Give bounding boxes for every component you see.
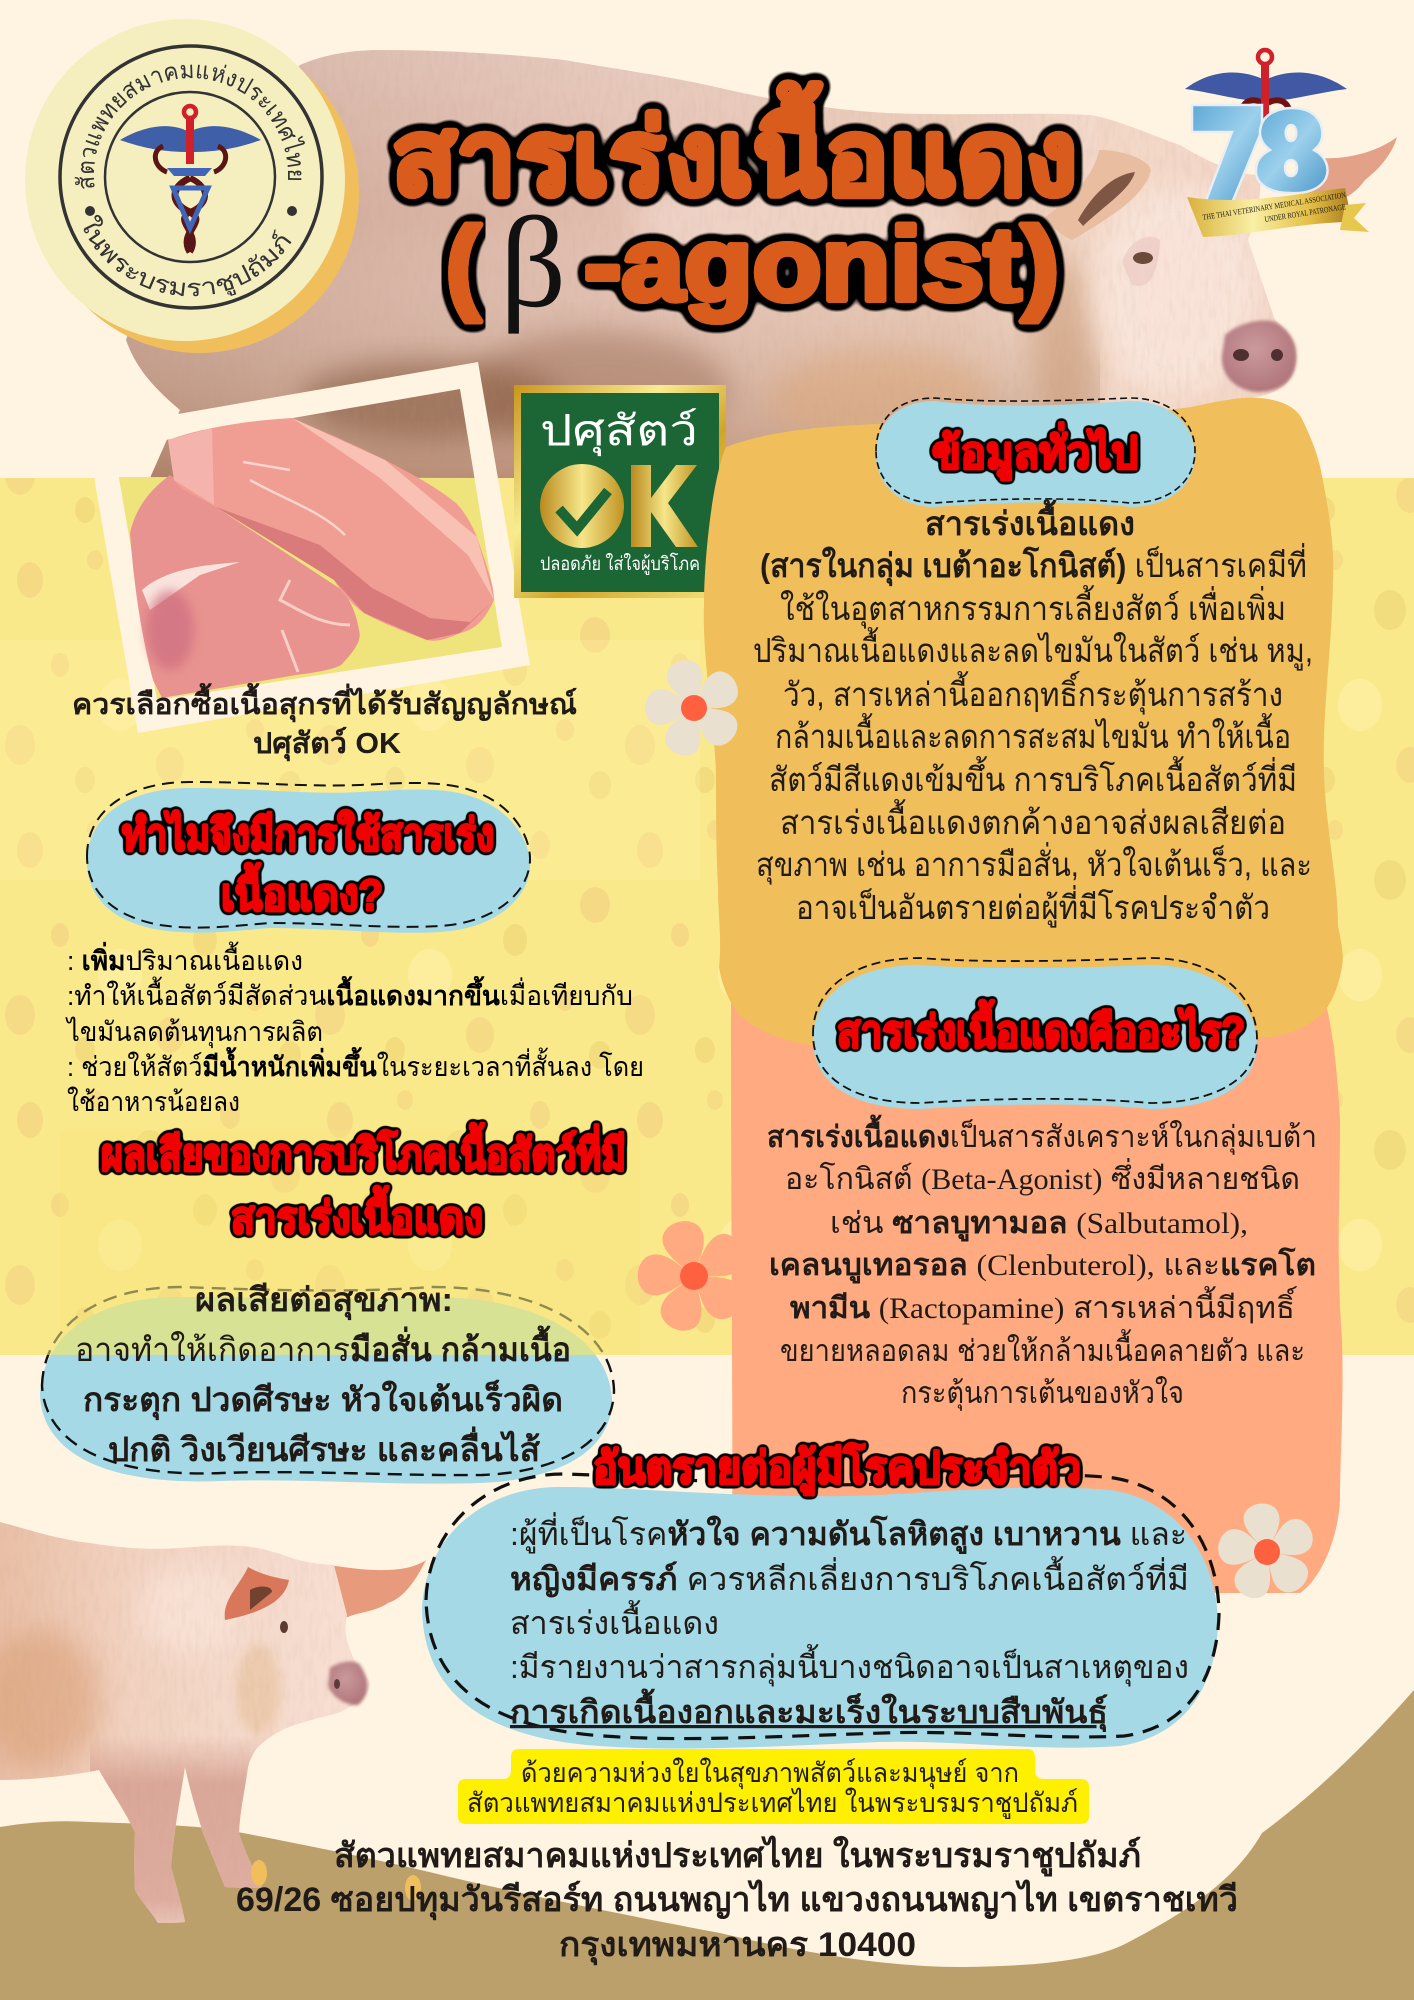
badge: ปศุสัตว์ OK (514, 385, 726, 598)
footer address: สัตวแพทยสมาคมแห่งประเทศไทย ในพระบรมราชูปถัมภ์ (334, 1835, 1141, 1877)
photo frame with pork (86, 362, 530, 733)
text block: reasons (65, 941, 644, 1117)
text block: general information: กล้ามเนื้อและลดการสะสมไขมัน ทำให้เนื้อ (775, 713, 1291, 755)
text block: what is it: กระตุ้นการเต้นของหัวใจ (901, 1376, 1184, 1412)
text block: general information: อาจเป็นอันตรายต่อผู้ที่มีโรคประจำตัว (796, 885, 1270, 928)
panel: risk groups: การเกิดเนื้องอกและมะเร็งในระบบสืบพันธุ์ (510, 1688, 1108, 1733)
text block: general information: สัตว์มีสีแดงเข้มขึ้น การบริโภคเนื้อสัตว์ที่มี (769, 756, 1297, 798)
heading bubble: what is it (813, 958, 1257, 1109)
text block: general information (753, 499, 1313, 928)
panel: what is it background (731, 1000, 1343, 1593)
panel: health effects: กระตุก ปวดศีรษะ หัวใจเต้นเร็วผิด (83, 1379, 563, 1421)
flower: left of general panel (644, 656, 744, 760)
callout: yellow message (458, 1749, 1089, 1824)
heading bubble: what is it: สารเร่งเนื้อแดงคืออะไร? (837, 999, 1245, 1057)
caption: choose pork with OK mark: ปศุสัตว์ OK (253, 726, 401, 761)
logo: 78 anniversary: UNDER ROYAL PATRONAGE (1264, 202, 1346, 224)
text block: reasons: ไขมันลดต้นทุนการผลิต (65, 1017, 323, 1049)
gold dots near the foot (251, 1860, 421, 1901)
panel: health effects (40, 1281, 614, 1484)
icon: near ear (225, 1567, 289, 1620)
large pig at top (100, 40, 1397, 480)
panel: risk groups (422, 1441, 1219, 1749)
heading bubble: why used: ทำไมจึงมีการใช้สารเร่ง (122, 809, 494, 860)
panel: health effects: อาจทำให้เกิดอาการมือสั่น กล้ามเนื้อ (75, 1325, 571, 1368)
footer address: กรุงเทพมหานคร 10400 (559, 1926, 916, 1966)
flower: coral (637, 1217, 752, 1336)
heading bubble: general information (876, 398, 1195, 507)
panel: health effects: ผลเสียต่อสุขภาพ: (195, 1281, 453, 1321)
title: ( (446, 207, 481, 323)
panel: risk groups: หญิงมีครรภ์ ควรหลีกเลี่ยงการบริโภคเนื้อสัตว์ที่มี (510, 1556, 1189, 1598)
text block: what is it: อะโกนิสต์ (Beta-Agonist) ซึ่งมีหลายชนิด (785, 1158, 1300, 1196)
logo: 78 anniversary (1185, 50, 1369, 237)
logo: veterinary association seal (25, 19, 359, 353)
text block: general information: ปริมาณเนื้อแดงและลดไขมันในสัตว์ เช่น หมู, (753, 627, 1313, 671)
text block: what is it: ขยายหลอดลม ช่วยให้กล้ามเนื้อคลายตัว และ (780, 1329, 1305, 1368)
icon: eye (1122, 237, 1160, 286)
icon: near ear (1045, 150, 1151, 240)
text block: reasons: : เพิ่มปริมาณเนื้อแดง (67, 941, 303, 976)
text block: what is it: สารเร่งเนื้อแดงเป็นสารสังเคราะห์ในกลุ่มเบต้า (767, 1114, 1317, 1156)
panel: health effects: ปกติ วิงเวียนศีรษะ และคลื่นไส้ (108, 1426, 541, 1468)
logo: veterinary association seal: ในพระบรมราชูปถัมภ์ (84, 214, 292, 296)
panel: risk groups: อันตรายต่อผู้มีโรคประจำตัว (593, 1441, 1081, 1495)
text block: what is it: เคลนบูเทอรอล (Clenbuterol), และแรคโต (769, 1246, 1316, 1284)
heading: harms of consuming: ผลเสียของการบริโภคเนื้อสัตว์ที่มี (101, 1122, 626, 1180)
text block: reasons: :ทำให้เนื้อสัตว์มีสัดส่วนเนื้อแดงมากขึ้นเมื่อเทียบกับ (67, 975, 633, 1011)
icon: far ear (1305, 137, 1397, 197)
panel: risk groups: :ผู้ที่เป็นโรคหัวใจ ความดันโลหิตสูง เบาหวาน และ (510, 1512, 1187, 1555)
icon: snout (1222, 321, 1296, 392)
icon: far ear (325, 1560, 426, 1618)
callout: yellow message: สัตวแพทยสมาคมแห่งประเทศไทย ในพระบรมราชูปถัมภ์ (467, 1787, 1078, 1819)
yellow dotted band (0, 478, 1414, 1355)
text block: general information: สารเร่งเนื้อแดง (925, 499, 1135, 542)
title: -agonist) (584, 207, 1059, 323)
icon: pork lower slab (130, 475, 360, 698)
text block: what is it: เช่น ซาลบูทามอล (Salbutamol), (830, 1207, 1248, 1242)
badge: ปศุสัตว์ OK: ปศุสัตว์ (540, 407, 698, 457)
heading bubble: why used: เนื้อแดง? (221, 862, 383, 920)
text block: general information: (สารในกลุ่ม เบต้าอะโกนิสต์) เป็นสารเคมีที่ (760, 543, 1307, 587)
logo: veterinary association seal: สัตวแพทยสมาคมแห่งประเทศไทย (74, 64, 305, 189)
heading: harms of consuming (101, 1122, 626, 1243)
title (392, 82, 1077, 335)
text block: general information: สุขภาพ เช่น อาการมือสั่น, หัวใจเต้นเร็ว, และ (756, 842, 1312, 885)
icon: pork upper slab (168, 418, 494, 641)
panel: general info background (704, 398, 1343, 1045)
text block: what is it (767, 1114, 1317, 1412)
badge: ปศุสัตว์ OK: ปลอดภัย ใส่ใจผู้บริโภค (540, 552, 700, 575)
title: สารเร่งเนื้อแดง (392, 82, 1077, 217)
text block: reasons: : ช่วยให้สัตว์มีน้ำหนักเพิ่มขึ้นในระยะเวลาที่สั้นลง โดย (67, 1046, 644, 1082)
text block: general information: ใช้ในอุตสาหกรรมการเลี้ยงสัตว์ เพื่อเพิ่ม (780, 585, 1286, 629)
caption: choose pork with OK mark: ควรเลือกซื้อเนื้อสุกรที่ได้รับสัญญลักษณ์ (72, 682, 577, 722)
pig at bottom left (0, 1515, 426, 1935)
title: β (500, 191, 566, 335)
icon: snout (328, 1662, 367, 1705)
flower: lower right (1216, 1501, 1318, 1604)
panel: risk groups: สารเร่งเนื้อแดง (510, 1600, 719, 1641)
heading: harms of consuming: สารเร่งเนื้อแดง (231, 1185, 483, 1243)
heading bubble: why used (87, 782, 530, 933)
text block: general information: วัว, สารเหล่านี้ออกฤทธิ์กระตุ้นการสร้าง (783, 671, 1283, 715)
text block: reasons: ใช้อาหารน้อยลง (67, 1086, 240, 1117)
heading bubble: general information: ข้อมูลทั่วไป (932, 422, 1138, 480)
text block: general information: สารเร่งเนื้อแดงตกค้างอาจส่งผลเสียต่อ (780, 799, 1286, 841)
logo: 78 anniversary: THE THAI VETERINARY MEDICAL ASSOCIATION (1202, 190, 1347, 222)
panel: risk groups: :มีรายงานว่าสารกลุ่มนี้บางชนิดอาจเป็นสาเหตุของ (510, 1644, 1189, 1687)
icon: eye (280, 1621, 288, 1633)
text block: what is it: พามีน (Ractopamine) สารเหล่านี้มีฤทธิ์ (790, 1286, 1298, 1325)
caption: choose pork with OK mark (72, 682, 577, 761)
icon: caduceus (120, 106, 261, 252)
tan ground shape (0, 1690, 1414, 2000)
footer address: 69/26 ซอยปทุมวันรีสอร์ท ถนนพญาไท แขวงถนนพญาไท เขตราชเทวี (236, 1879, 1238, 1921)
callout: yellow message: ด้วยความห่วงใยในสุขภาพสัตว์และมนุษย์ จาก (521, 1757, 1019, 1790)
footer address (236, 1835, 1238, 1966)
